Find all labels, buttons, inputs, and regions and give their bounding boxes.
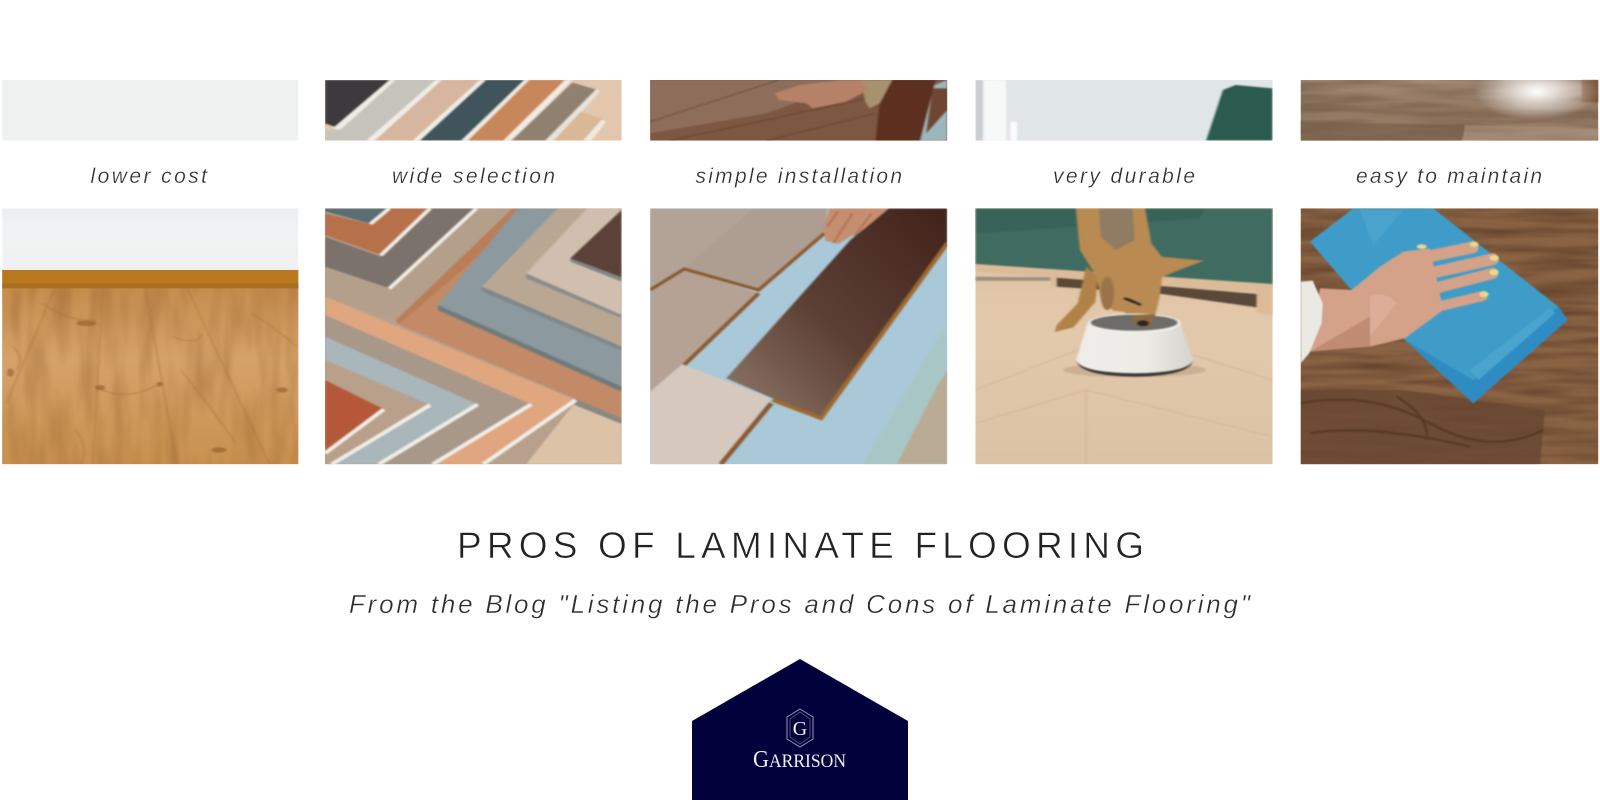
logo emblem: G: [793, 718, 807, 740]
photo strip: wall and green pillow: [975, 80, 1273, 141]
title: PROS OF LAMINATE FLOORING: [457, 525, 1144, 566]
caption: easy to maintain: easy to maintain: [1356, 165, 1542, 188]
photo: dog eating from a bowl: [975, 208, 1273, 464]
photo strip: laminate samples: [325, 80, 622, 141]
photo: wood floor and baseboard: [2, 208, 298, 464]
logo badge: house shape: [692, 659, 908, 800]
logo emblem: [787, 709, 813, 747]
caption: wide selection: wide selection: [392, 165, 555, 188]
caption: simple installation: simple installation: [696, 165, 902, 188]
photo strip: lower cost wall: [2, 80, 298, 141]
photo: hand wiping floor with blue cloth: [1301, 208, 1598, 464]
caption: very durable: very durable: [1053, 165, 1195, 188]
photo: fanned laminate samples: [325, 208, 622, 464]
photo strip: wood with glare: [1300, 80, 1598, 141]
photo strip: installer's hand on plank: [650, 80, 947, 141]
photo: installing laminate planks: [650, 208, 947, 464]
logo wordmark: GARRISON: [753, 747, 846, 773]
caption: lower cost: lower cost: [90, 165, 208, 188]
subtitle: From the Blog "Listing the Pros and Cons of Laminate Flooring": [349, 589, 1252, 619]
